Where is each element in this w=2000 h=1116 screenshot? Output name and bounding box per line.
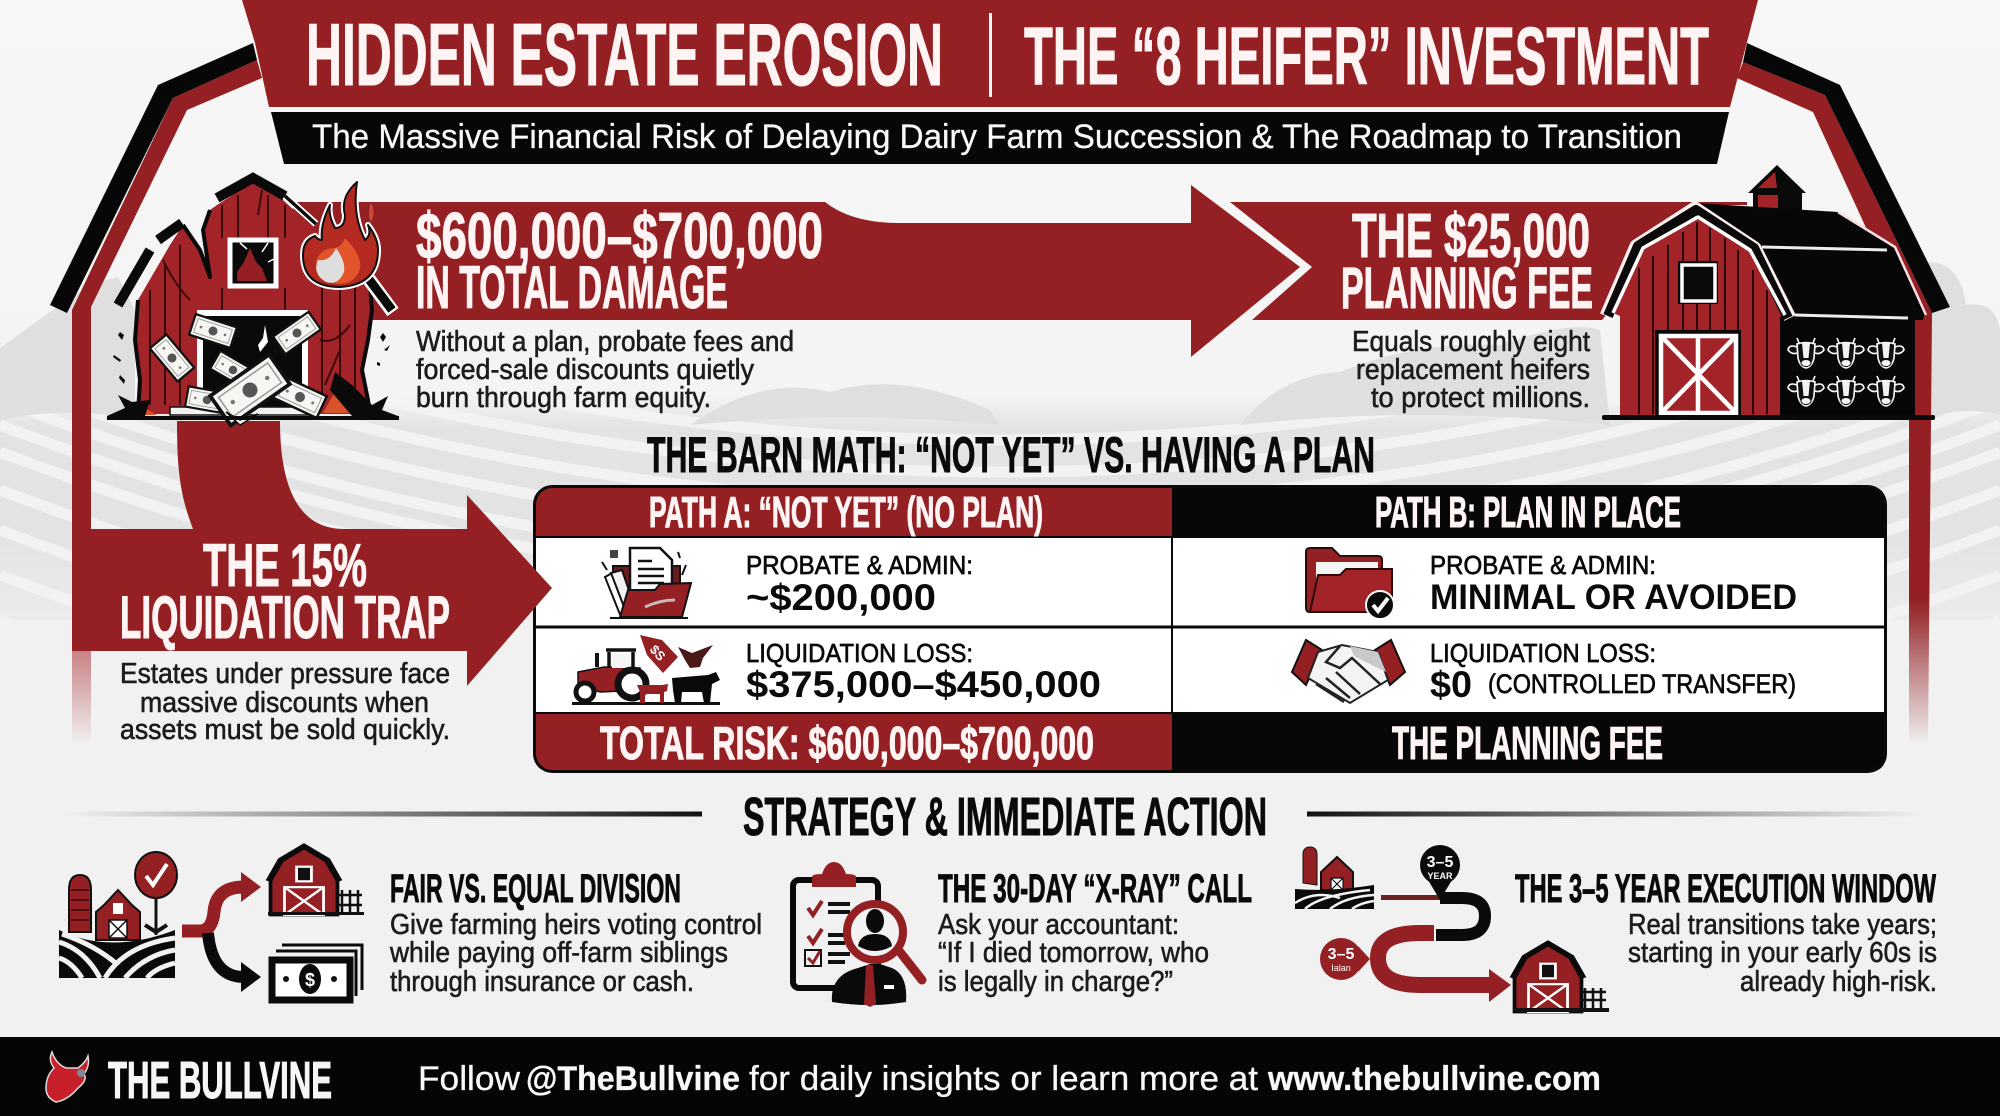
table header: path B: PATH B: PLAN IN PLACE xyxy=(1375,488,1681,537)
text: damage explanation xyxy=(416,326,794,414)
text: path A probate label: PROBATE & ADMIN: xyxy=(746,550,973,580)
icon: farm splitting to barn and cash xyxy=(59,846,364,1000)
title: hidden estate erosion: HIDDEN ESTATE EROSION xyxy=(306,5,943,104)
text: liquidation explanation: Estates under pressure face xyxy=(120,658,450,690)
text: execution body: already high-risk. xyxy=(1740,966,1937,998)
heading: planning fee: PLANNING FEE xyxy=(1341,256,1593,321)
text: brand: THE BULLVINE xyxy=(108,1052,332,1110)
text: path A total: TOTAL RISK: $600,000–$700,000 xyxy=(600,717,1094,769)
text: planning fee explanation: replacement heifers xyxy=(1356,354,1590,386)
heading: x-ray call: THE 30-DAY “X-RAY” CALL xyxy=(938,867,1252,911)
text: follow line: @TheBullvine xyxy=(526,1060,740,1098)
title divider xyxy=(989,13,992,97)
arrow: stem into liquidation trap xyxy=(72,421,552,686)
heading: damage amount: $600,000–$700,000 xyxy=(416,199,823,272)
icon: winding path from farm to barn: 3–5 xyxy=(1328,946,1354,963)
text: x-ray body: “If I died tomorrow, who xyxy=(938,937,1209,969)
callout: liquidation trap xyxy=(120,532,450,746)
text: planning fee explanation: Equals roughly eight xyxy=(1352,326,1590,358)
icon: winding path from farm to barn: 3–5 xyxy=(1427,854,1453,871)
icon: farm splitting to barn and cash: $ xyxy=(305,970,315,990)
text: x-ray body: Ask your accountant: xyxy=(938,909,1179,941)
icon: burning barn with money xyxy=(107,178,399,425)
comparison table xyxy=(534,486,1886,772)
strategy item: 30-day x-ray call xyxy=(793,862,1252,1007)
heading: fair vs equal: FAIR VS. EQUAL DIVISION xyxy=(390,867,681,911)
text: execution body: starting in your early 60s is xyxy=(1628,937,1937,969)
background: farm landscape xyxy=(0,262,2000,604)
text: path A probate value: ~$200,000 xyxy=(746,577,936,618)
heading: the 25000: THE $25,000 xyxy=(1352,202,1590,271)
heading: in total damage: IN TOTAL DAMAGE xyxy=(416,254,728,321)
strategy heading with rules xyxy=(64,787,1925,847)
text: follow line: Follow xyxy=(418,1060,520,1098)
barn roof frame: left xyxy=(50,43,262,745)
text: planning fee explanation xyxy=(1352,326,1590,414)
text: damage explanation: Without a plan, probate fees and xyxy=(416,326,794,358)
strategy item: fair vs equal division xyxy=(59,846,762,1000)
barn roof frame: right xyxy=(1737,43,1950,745)
text: path B probate value: MINIMAL OR AVOIDED xyxy=(1430,578,1797,617)
text: x-ray body xyxy=(938,909,1209,998)
text: damage explanation: forced-sale discounts quietly xyxy=(416,354,754,386)
text: damage explanation: burn through farm equity. xyxy=(416,382,711,414)
text: liquidation explanation: assets must be sold quickly. xyxy=(120,714,450,746)
strategy heading with rules: STRATEGY & IMMEDIATE ACTION xyxy=(743,787,1267,847)
title banner xyxy=(242,0,1758,107)
text: liquidation explanation: massive discounts when xyxy=(140,687,429,719)
icon: tractor and livestock for sale xyxy=(572,635,720,705)
text: path B total: THE PLANNING FEE xyxy=(1392,717,1663,769)
text: fair vs equal body: through insurance or cash. xyxy=(390,966,694,998)
text: controlled transfer: (CONTROLLED TRANSFER) xyxy=(1488,669,1796,699)
text: path A liquidation label: LIQUIDATION LOSS: xyxy=(746,638,973,668)
text: path A liquidation value: $375,000–$450,000 xyxy=(746,664,1101,705)
text: fair vs equal body: Give farming heirs voting control xyxy=(390,909,762,941)
footer bar xyxy=(0,1037,2000,1116)
icon: bull logo xyxy=(46,1052,88,1102)
text: follow line: for daily insights or learn more at xyxy=(749,1060,1259,1098)
text: execution body xyxy=(1628,909,1937,998)
text: path B liquidation value: $0 xyxy=(1430,664,1472,705)
text: path B probate label: PROBATE & ADMIN: xyxy=(1430,550,1656,580)
icon: healthy barn with cows xyxy=(1602,165,1935,420)
text: follow line xyxy=(418,1060,1601,1098)
table header: path A: PATH A: “NOT YET” (NO PLAN) xyxy=(649,488,1043,537)
icon: overflowing folder xyxy=(602,548,691,619)
icon: winding path from farm to barn: Ialan xyxy=(1331,963,1351,973)
text: follow line: www.thebullvine.com xyxy=(1267,1060,1601,1098)
heading: liquidation trap: LIQUIDATION TRAP xyxy=(120,584,450,651)
text: fair vs equal body: while paying off-farm siblings xyxy=(389,937,728,969)
subtitle band: The Massive Financial Risk of Delaying Dairy Farm Succession & The Roadmap to Transition xyxy=(312,118,1682,156)
arrow: total damage to planning fee xyxy=(293,185,1747,357)
icon: handshake xyxy=(1292,640,1405,703)
text: planning fee explanation: to protect millions. xyxy=(1371,382,1590,414)
text: x-ray body: is legally in charge?” xyxy=(938,966,1173,998)
heading: the 15 percent: THE 15% xyxy=(203,532,367,599)
text: path B liquidation label: LIQUIDATION LOSS: xyxy=(1430,638,1656,668)
icon: tractor and livestock for sale: $S xyxy=(647,642,669,664)
text: fair vs equal body xyxy=(389,909,762,998)
icon: clipboard with magnifier and advisor xyxy=(793,862,922,1007)
text: liquidation explanation xyxy=(120,658,450,746)
icon: winding path from farm to barn xyxy=(1295,845,1609,1012)
strategy item: execution window xyxy=(1295,845,1937,1012)
callout: planning fee xyxy=(1341,202,1593,414)
text: execution body: Real transitions take years; xyxy=(1628,909,1937,941)
callout: total damage xyxy=(416,199,823,414)
icon: folder with check xyxy=(1306,548,1394,619)
icon: winding path from farm to barn: YEAR xyxy=(1427,871,1453,881)
heading: barn math: THE BARN MATH: “NOT YET” VS. HAVING A PLAN xyxy=(647,427,1375,483)
